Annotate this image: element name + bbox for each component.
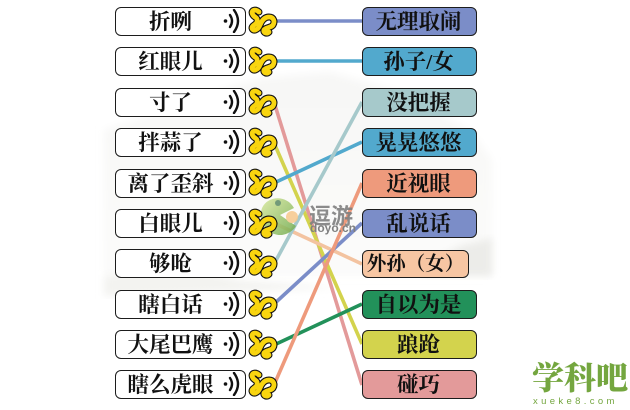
card: 踉跄 xyxy=(362,330,477,359)
card: 孙子/女 xyxy=(362,47,477,76)
left column: word cards xyxy=(115,7,246,399)
card: 踉跄: 踉跄 xyxy=(397,333,440,357)
card: 大尾巴鹰 xyxy=(115,330,246,359)
card: 红眼儿 xyxy=(115,47,246,76)
card: 孙子/女: 孙子/女 xyxy=(383,50,454,74)
card: 大尾巴鹰: 大尾巴鹰 xyxy=(127,333,214,357)
card: 红眼儿: 红眼儿 xyxy=(138,50,203,74)
card: 近视眼: 近视眼 xyxy=(386,172,451,196)
card: 折咧 xyxy=(115,7,246,36)
right column: meaning cards xyxy=(362,7,477,399)
logo text: xueke8.com: xueke8.com xyxy=(533,396,618,407)
card: 自以为是 xyxy=(362,290,477,319)
card: 瞎么虎眼 xyxy=(115,370,246,399)
doyo watermark xyxy=(260,198,356,235)
card: 没把握 xyxy=(362,88,477,117)
card: 自以为是: 自以为是 xyxy=(375,293,462,317)
card: 碰巧 xyxy=(362,370,477,399)
card: 寸了 xyxy=(115,88,246,117)
card: 折咧: 折咧 xyxy=(149,10,192,34)
card: 晃晃悠悠: 晃晃悠悠 xyxy=(375,131,462,155)
card: 白眼儿 xyxy=(115,209,246,238)
card: 离了歪斜: 离了歪斜 xyxy=(127,172,214,196)
card: 瞎么虎眼: 瞎么虎眼 xyxy=(127,373,214,397)
logo text: doyo.cn: doyo.cn xyxy=(310,221,356,235)
card: 乱说话 xyxy=(362,209,477,238)
card: 外孙（女）: 外孙（女） xyxy=(367,254,464,275)
card: 没把握: 没把握 xyxy=(386,91,451,115)
card: 无理取闹: 无理取闹 xyxy=(375,10,462,34)
card: 无理取闹 xyxy=(362,7,477,36)
logo text: 学科吧: 学科吧 xyxy=(532,353,628,399)
card: 够呛: 够呛 xyxy=(149,252,192,276)
icon: green pac-man logo xyxy=(260,198,298,235)
card: 外孙（女） xyxy=(362,250,469,278)
logo text: 逗游: 逗游 xyxy=(309,204,353,229)
xueke8 logo xyxy=(532,353,628,407)
card: 离了歪斜 xyxy=(115,169,246,198)
card: 拌蒜了: 拌蒜了 xyxy=(138,131,203,155)
card: 瞎白话: 瞎白话 xyxy=(138,293,203,317)
card: 瞎白话 xyxy=(115,290,246,319)
card: 够呛 xyxy=(115,249,246,278)
card: 拌蒜了 xyxy=(115,128,246,157)
card: 碰巧: 碰巧 xyxy=(397,373,440,397)
card: 晃晃悠悠 xyxy=(362,128,477,157)
card: 乱说话: 乱说话 xyxy=(386,212,451,236)
card: 寸了: 寸了 xyxy=(149,91,192,115)
card: 白眼儿: 白眼儿 xyxy=(138,212,203,236)
card: 近视眼 xyxy=(362,169,477,198)
